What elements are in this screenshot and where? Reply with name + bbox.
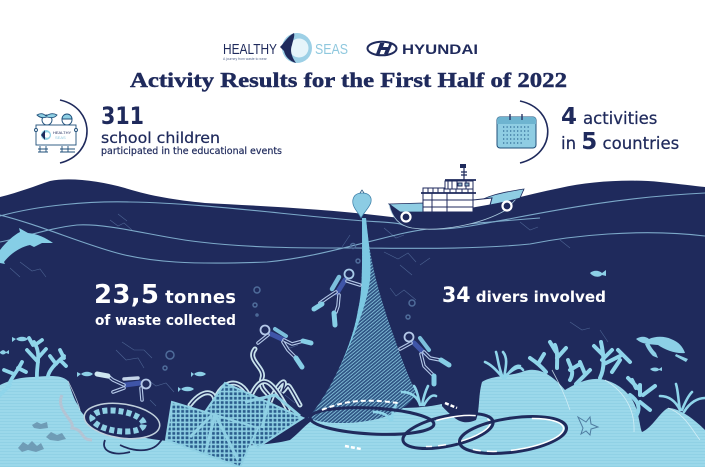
ocean background xyxy=(0,179,705,467)
seaweed: fans xyxy=(374,352,705,420)
icon: calendar xyxy=(497,114,536,148)
label: school children: school children xyxy=(101,129,220,147)
text: in 5 countries: in 5 countries xyxy=(561,129,679,155)
bubbles xyxy=(163,244,415,370)
diver: top centre xyxy=(314,270,360,325)
tyre net pile xyxy=(61,395,164,454)
title: Activity Results for the First Half of 2022 xyxy=(130,68,567,92)
lifebuoys xyxy=(402,212,410,222)
wave lines xyxy=(0,193,705,263)
turtle xyxy=(636,337,688,362)
diver: left lower xyxy=(97,374,150,400)
dolphin xyxy=(0,228,53,264)
ship xyxy=(389,164,524,229)
bow xyxy=(472,189,524,208)
logo: Hyundai: HYUNDAI xyxy=(402,41,478,57)
small debris on seabed xyxy=(18,422,66,452)
headline: divers: 34 divers involved xyxy=(442,283,606,307)
fishes xyxy=(0,270,662,392)
mesh panel: back xyxy=(205,383,303,447)
mesh panel: braces xyxy=(190,395,300,460)
superstructure xyxy=(423,181,492,212)
logo: Healthy Seas: HEALTHY xyxy=(223,42,277,58)
diver: left upper xyxy=(258,326,311,367)
left and centre seabed xyxy=(0,376,442,467)
buoy xyxy=(353,190,371,218)
subhead: waste collected: of waste collected xyxy=(95,313,236,329)
icon: children holding sign xyxy=(34,114,78,152)
hull xyxy=(389,190,524,229)
ghost net: rope tangle xyxy=(190,349,300,410)
right seabed xyxy=(440,370,705,467)
icon: children holding sign: HEALTHY xyxy=(53,130,71,135)
stat: activities and countries xyxy=(497,101,679,163)
stern xyxy=(389,203,423,212)
coral: right xyxy=(530,342,655,416)
ghost nets: rings xyxy=(309,401,569,459)
coral: left xyxy=(0,338,66,395)
stat: school children xyxy=(34,100,282,163)
logo: Healthy Seas xyxy=(223,33,348,63)
net: funnel from buoy xyxy=(308,218,416,423)
mound contours xyxy=(68,370,700,440)
logo: Healthy Seas: A journey from waste to wear xyxy=(223,57,268,61)
diver: right xyxy=(400,332,449,384)
mesh panel: front xyxy=(166,402,258,467)
label: participated: participated in the educational events xyxy=(101,146,282,157)
number 311: 311 xyxy=(101,102,144,130)
headline: tonnes: 23,5 tonnes xyxy=(94,280,236,310)
texture: faint contour squiggles xyxy=(10,214,608,406)
seabed xyxy=(0,370,705,467)
arc xyxy=(60,100,87,163)
starfish xyxy=(578,417,598,435)
logo: Healthy Seas: SEAS xyxy=(315,42,348,58)
icon: children holding sign: SEAS xyxy=(55,135,66,140)
logo: Hyundai xyxy=(368,41,478,57)
mast xyxy=(461,166,467,180)
text: 4 activities: 4 activities xyxy=(561,104,657,130)
arc xyxy=(520,101,548,163)
